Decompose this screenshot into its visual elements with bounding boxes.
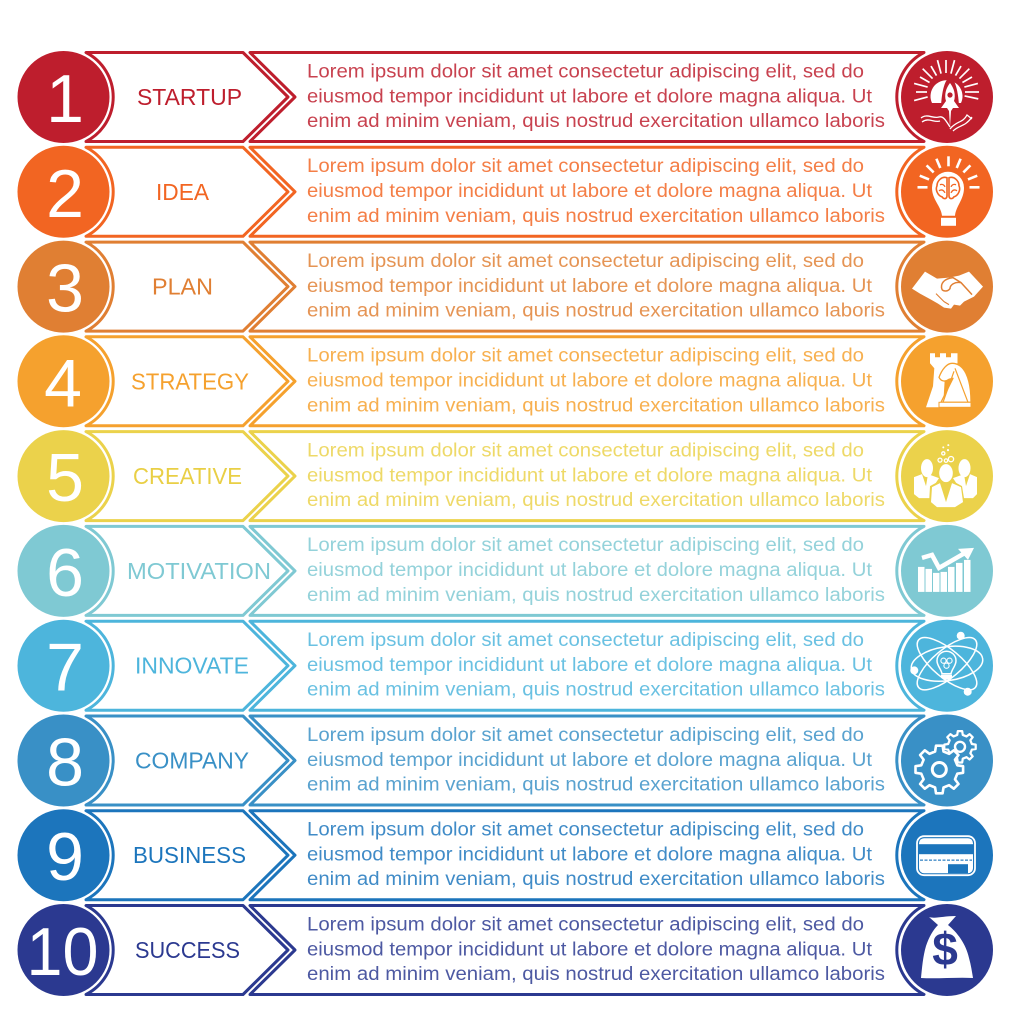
icon: chess pieces [901, 335, 993, 427]
label arrow: innovate [86, 621, 288, 710]
icon: money bag [901, 904, 993, 996]
number badge 5: 5 [46, 440, 84, 516]
number badge 1: 1 [46, 61, 84, 137]
number badge 10 [18, 904, 110, 996]
description panel [250, 811, 924, 900]
description panel [250, 716, 924, 805]
label arrow: strategy: STRATEGY [131, 368, 249, 394]
label arrow: idea: IDEA [156, 179, 210, 205]
icon: money bag: $ [932, 923, 958, 975]
description panel: enim ad minim veniam, quis nostrud exercitation ullamco laboris [307, 394, 885, 416]
description panel: eiusmod tempor incididunt ut labore et dolore magna aliqua. Ut [307, 370, 873, 392]
description panel [250, 621, 924, 710]
description panel: enim ad minim veniam, quis nostrud exercitation ullamco laboris [307, 868, 885, 890]
row 7: innovate [18, 620, 993, 712]
number badge 2: 2 [46, 156, 84, 232]
row 9: business [18, 809, 993, 901]
description panel: eiusmod tempor incididunt ut labore et dolore magna aliqua. Ut [307, 749, 873, 771]
label arrow: business: BUSINESS [133, 842, 246, 868]
number badge 7: 7 [46, 630, 84, 706]
number badge 6: 6 [46, 535, 84, 611]
description panel: enim ad minim veniam, quis nostrud exercitation ullamco laboris [307, 774, 885, 796]
icon: credit card [901, 809, 993, 901]
description panel: Lorem ipsum dolor sit amet consectetur adipiscing elit, sed do [307, 913, 864, 935]
row 5: creative [18, 430, 993, 522]
label arrow: innovate: INNOVATE [135, 653, 249, 679]
label arrow: startup [86, 52, 288, 142]
icon: rocket [901, 51, 993, 143]
label arrow: motivation [86, 526, 288, 615]
description panel: eiusmod tempor incididunt ut labore et dolore magna aliqua. Ut [307, 85, 873, 107]
description panel: enim ad minim veniam, quis nostrud exercitation ullamco laboris [307, 489, 885, 511]
label arrow: company: COMPANY [135, 748, 249, 774]
icon: gears [901, 714, 993, 806]
label arrow: business [86, 811, 288, 900]
row 1: startup [18, 51, 993, 143]
icon: team with ideas [901, 430, 993, 522]
description panel: eiusmod tempor incididunt ut labore et dolore magna aliqua. Ut [307, 464, 873, 486]
description panel: Lorem ipsum dolor sit amet consectetur adipiscing elit, sed do [307, 60, 864, 82]
description panel: Lorem ipsum dolor sit amet consectetur adipiscing elit, sed do [307, 250, 864, 272]
label arrow: motivation: MOTIVATION [127, 558, 271, 584]
description panel: enim ad minim veniam, quis nostrud exercitation ullamco laboris [307, 963, 885, 985]
label arrow: success: SUCCESS [135, 937, 240, 963]
row 6: motivation [18, 525, 993, 617]
row 10: success [18, 904, 993, 996]
description panel [250, 242, 924, 331]
row 8: company [18, 714, 993, 806]
description panel [250, 52, 924, 142]
number badge 4 [18, 335, 110, 427]
description panel: enim ad minim veniam, quis nostrud exercitation ullamco laboris [307, 679, 885, 701]
number badge 8 [18, 714, 110, 806]
description panel: eiusmod tempor incididunt ut labore et dolore magna aliqua. Ut [307, 844, 873, 866]
description panel: Lorem ipsum dolor sit amet consectetur adipiscing elit, sed do [307, 155, 864, 177]
number badge 3: 3 [46, 251, 84, 327]
number badge 4: 4 [44, 345, 82, 421]
description panel: Lorem ipsum dolor sit amet consectetur adipiscing elit, sed do [307, 819, 864, 841]
description panel: eiusmod tempor incididunt ut labore et dolore magna aliqua. Ut [307, 938, 873, 960]
number badge 2 [18, 146, 110, 238]
number badge 3 [18, 241, 110, 333]
number badge 9: 9 [46, 819, 84, 895]
row 3: plan [18, 241, 993, 333]
description panel: Lorem ipsum dolor sit amet consectetur adipiscing elit, sed do [307, 724, 864, 746]
icon: handshake [901, 241, 993, 333]
description panel [250, 432, 924, 521]
label arrow: success [86, 906, 288, 994]
description panel: Lorem ipsum dolor sit amet consectetur adipiscing elit, sed do [307, 439, 864, 461]
label arrow: startup: STARTUP [137, 84, 242, 110]
number badge 10: 10 [26, 914, 98, 990]
icon: light bulb with brain [901, 146, 993, 238]
label arrow: plan [86, 242, 288, 331]
number badge 9 [18, 809, 110, 901]
description panel: eiusmod tempor incididunt ut labore et dolore magna aliqua. Ut [307, 654, 873, 676]
description panel: eiusmod tempor incididunt ut labore et dolore magna aliqua. Ut [307, 275, 873, 297]
number badge 1 [18, 51, 110, 143]
label arrow: plan: PLAN [152, 274, 213, 300]
label arrow: creative: CREATIVE [133, 463, 242, 489]
description panel: enim ad minim veniam, quis nostrud exercitation ullamco laboris [307, 584, 885, 606]
number badge 8: 8 [46, 724, 84, 800]
number badge 6 [18, 525, 110, 617]
description panel [250, 526, 924, 615]
number badge 5 [18, 430, 110, 522]
number badge 7 [18, 620, 110, 712]
description panel: Lorem ipsum dolor sit amet consectetur adipiscing elit, sed do [307, 345, 864, 367]
description panel: Lorem ipsum dolor sit amet consectetur adipiscing elit, sed do [307, 534, 864, 556]
description panel: enim ad minim veniam, quis nostrud exercitation ullamco laboris [307, 205, 885, 227]
description panel: enim ad minim veniam, quis nostrud exercitation ullamco laboris [307, 110, 885, 132]
row 4: strategy [18, 335, 993, 427]
label arrow: strategy [86, 337, 288, 426]
description panel: eiusmod tempor incididunt ut labore et dolore magna aliqua. Ut [307, 559, 873, 581]
row 2: idea [18, 146, 993, 238]
label arrow: idea [86, 147, 288, 236]
description panel: eiusmod tempor incididunt ut labore et dolore magna aliqua. Ut [307, 180, 873, 202]
label arrow: company [86, 716, 288, 805]
label arrow: creative [86, 432, 288, 521]
description panel: enim ad minim veniam, quis nostrud exercitation ullamco laboris [307, 300, 885, 322]
description panel: Lorem ipsum dolor sit amet consectetur adipiscing elit, sed do [307, 629, 864, 651]
icon: atom with bulb [901, 620, 993, 712]
description panel [250, 337, 924, 426]
description panel [250, 906, 924, 994]
description panel [250, 147, 924, 236]
icon: growth chart [901, 525, 993, 617]
